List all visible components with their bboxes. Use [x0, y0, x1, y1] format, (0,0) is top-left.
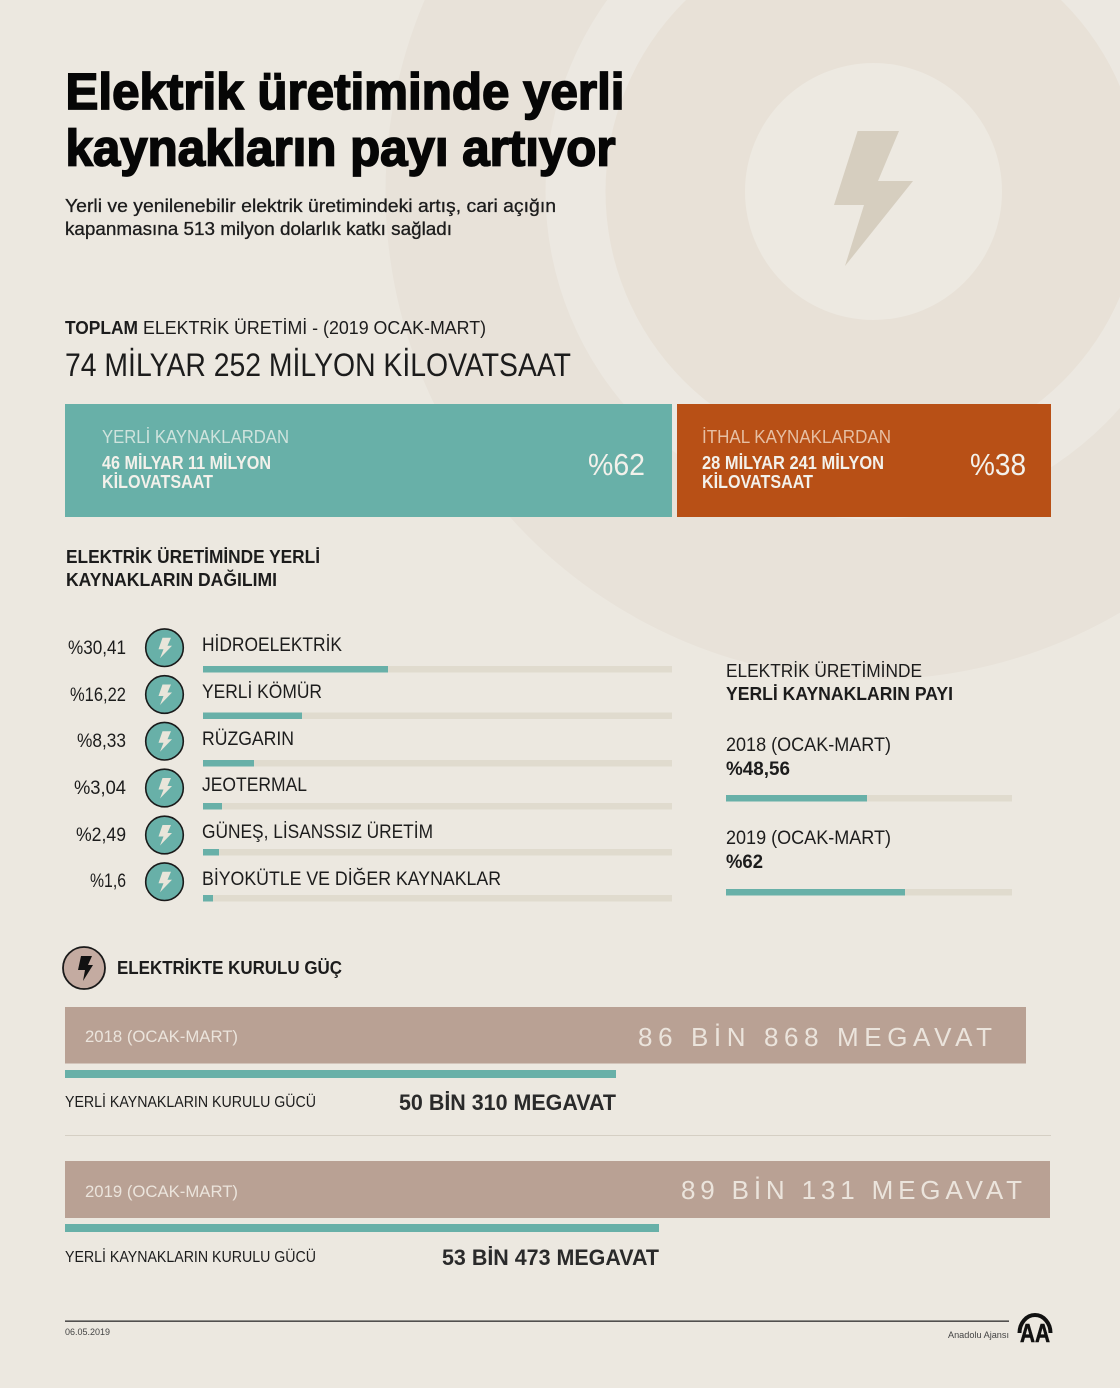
row: biomass: %1,6	[90, 871, 126, 892]
share 2019: %62	[726, 852, 763, 873]
footer: Anadolu Ajansı	[948, 1330, 1009, 1340]
row: wind: %8,33	[77, 731, 126, 752]
panel: domestic sources: 46 MİLYAR 11 MİLYON	[102, 453, 271, 473]
row: solar	[76, 816, 672, 856]
capacity 2019: 2019 (OCAK-MART)	[85, 1182, 238, 1201]
panel: domestic sources: KİLOVATSAAT	[102, 472, 213, 492]
icon: agency logo: AA	[1020, 1318, 1050, 1348]
row: coal: YERLİ KÖMÜR	[202, 682, 322, 703]
chart: domestic source distribution	[68, 629, 672, 902]
share 2019: 2019 (OCAK-MART)	[726, 828, 891, 849]
footer	[65, 1315, 1050, 1348]
share 2018: %48,56	[726, 759, 790, 780]
heading: distribution of domestic sources	[66, 547, 320, 590]
panel: domestic share: YERLİ KAYNAKLARIN PAYI	[726, 684, 953, 704]
subtitle: Yerli ve yenilenebilir elektrik üretimindeki artış, cari açığın	[65, 195, 556, 216]
row: hydro: %30,41	[68, 638, 126, 659]
panel: imported sources: %38	[970, 447, 1026, 482]
row: solar: GÜNEŞ, LİSANSSIZ ÜRETİM	[202, 822, 433, 843]
panel: domestic sources	[65, 404, 672, 517]
title: kaynakların payı artıyor	[66, 120, 616, 176]
capacity 2018: YERLİ KAYNAKLARIN KURULU GÜCÜ	[65, 1093, 316, 1111]
capacity 2019	[65, 1161, 1050, 1270]
heading: distribution of domestic sources: ELEKTRİK ÜRETİMİNDE YERLİ	[66, 547, 320, 567]
title: Elektrik üretiminde yerli	[66, 63, 624, 120]
heading: installed capacity: ELEKTRİKTE KURULU GÜÇ	[117, 958, 342, 978]
background concentric circles with lightning bolt	[386, 0, 1120, 680]
share 2018	[726, 735, 1012, 802]
row: hydro	[68, 629, 672, 672]
panel: domestic share	[726, 661, 1012, 896]
row: geothermal	[74, 769, 672, 810]
row: geothermal: JEOTERMAL	[202, 775, 307, 796]
row: biomass: BİYOKÜTLE VE DİĞER KAYNAKLAR	[202, 868, 501, 890]
panel: imported sources: 28 MİLYAR 241 MİLYON	[702, 453, 884, 473]
share 2019	[726, 828, 1012, 896]
panel: imported sources: İTHAL KAYNAKLARDAN	[702, 427, 891, 447]
subtitle	[65, 195, 556, 239]
total production heading: ELEKTRİK ÜRETİMİ - (2019 OCAK-MART)	[143, 318, 486, 338]
panel: imported sources	[677, 404, 1051, 517]
capacity 2018	[65, 1007, 1026, 1115]
row: biomass	[90, 863, 672, 902]
subtitle: kapanmasına 513 milyon dolarlık katkı sağladı	[65, 218, 452, 239]
heading: distribution of domestic sources: KAYNAKLARIN DAĞILIMI	[66, 569, 277, 590]
footer: 06.05.2019	[65, 1327, 110, 1337]
capacity 2019: 89 BİN 131 MEGAVAT	[681, 1175, 1022, 1205]
total production heading: TOPLAM	[65, 318, 138, 338]
share 2018: 2018 (OCAK-MART)	[726, 735, 891, 756]
heading: installed capacity	[63, 947, 342, 989]
total production value: 74 MİLYAR 252 MİLYON KİLOVATSAAT	[65, 347, 571, 383]
panel: domestic share: ELEKTRİK ÜRETİMİNDE	[726, 661, 922, 681]
capacity 2019: 53 BİN 473 MEGAVAT	[442, 1245, 660, 1270]
capacity 2018: 2018 (OCAK-MART)	[85, 1027, 238, 1046]
row: solar: %2,49	[76, 825, 126, 846]
panel: imported sources: KİLOVATSAAT	[702, 472, 813, 492]
capacity 2018: 86 BİN 868 MEGAVAT	[638, 1022, 992, 1052]
panel: domestic sources: YERLİ KAYNAKLARDAN	[102, 427, 289, 447]
row: wind: RÜZGARIN	[202, 729, 294, 750]
title	[66, 63, 624, 176]
row: geothermal: %3,04	[74, 778, 126, 799]
row: hydro: HİDROELEKTRİK	[202, 635, 342, 656]
row: coal	[70, 676, 672, 719]
panel: domestic sources: %62	[588, 447, 645, 482]
row: coal: %16,22	[70, 685, 126, 706]
row: wind	[77, 722, 672, 766]
capacity 2019: YERLİ KAYNAKLARIN KURULU GÜCÜ	[65, 1248, 316, 1266]
capacity 2018: 50 BİN 310 MEGAVAT	[399, 1090, 617, 1115]
